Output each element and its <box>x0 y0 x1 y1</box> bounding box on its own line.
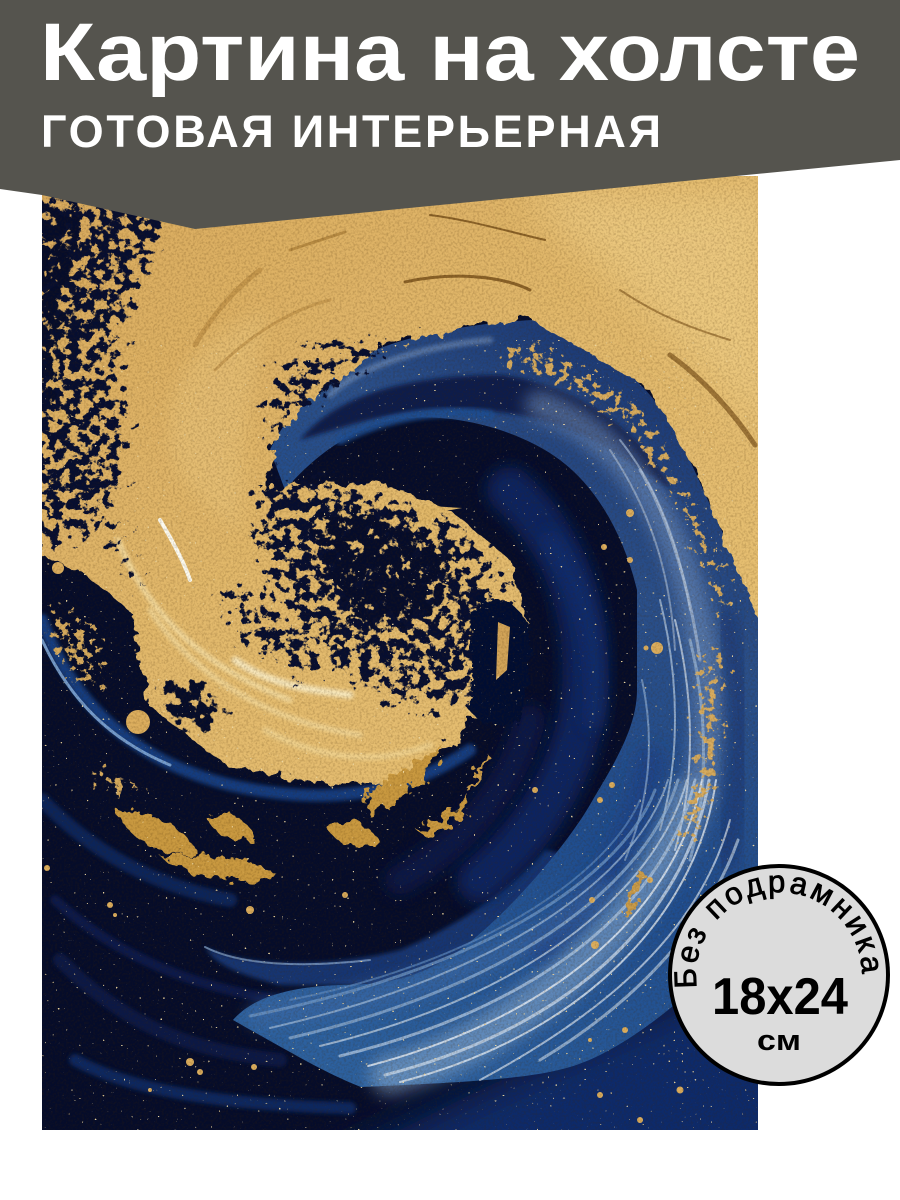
lower left sweep strokes <box>42 620 470 1108</box>
right centre navy strip <box>470 600 531 727</box>
badge unit: см <box>757 1025 801 1057</box>
light wave strokes <box>205 340 740 1082</box>
arm navy hole <box>148 678 233 737</box>
gold field and swirl body <box>42 176 758 786</box>
subtitle: ГОТОВАЯ ИНТЕРЬЕРНАЯ <box>41 106 661 157</box>
far left dense navy splatter <box>42 200 84 418</box>
inner navy strokes <box>400 490 596 880</box>
gold arm strokes <box>118 520 430 757</box>
blue wave crest <box>233 320 775 1087</box>
centre dense splatter <box>308 503 460 632</box>
lower right navy glow <box>352 1006 758 1130</box>
centre gold shards <box>415 505 462 530</box>
badge: canvas size <box>668 864 890 1086</box>
centre navy splatter <box>244 467 522 717</box>
upper crest navy splatter <box>254 330 387 453</box>
upper left navy splatter <box>42 197 164 552</box>
crest gold speckle <box>490 335 745 640</box>
badge size: 18x24 <box>712 968 848 1026</box>
wave side gold speckle <box>672 646 736 850</box>
arm fine splatter <box>211 582 325 688</box>
title: Картина на холсте <box>40 7 860 98</box>
left rim gold speckle <box>78 764 150 802</box>
header band <box>0 0 900 229</box>
scratches in gold <box>195 215 755 445</box>
left edge arm splatter <box>103 518 151 596</box>
crest dark band <box>300 375 672 490</box>
lower gold patches <box>118 747 471 880</box>
fine gold dust <box>42 340 758 1130</box>
painting: navy and gold swirl <box>42 176 758 1130</box>
badge arc text: Без подрамника <box>674 875 878 987</box>
lower left gold speckle <box>42 602 112 694</box>
gold bright sheen <box>544 187 758 406</box>
wave gold streaks <box>470 755 642 915</box>
mid blue brush band <box>205 850 590 985</box>
canvas grain <box>42 176 758 1130</box>
large flecks <box>44 509 684 1123</box>
